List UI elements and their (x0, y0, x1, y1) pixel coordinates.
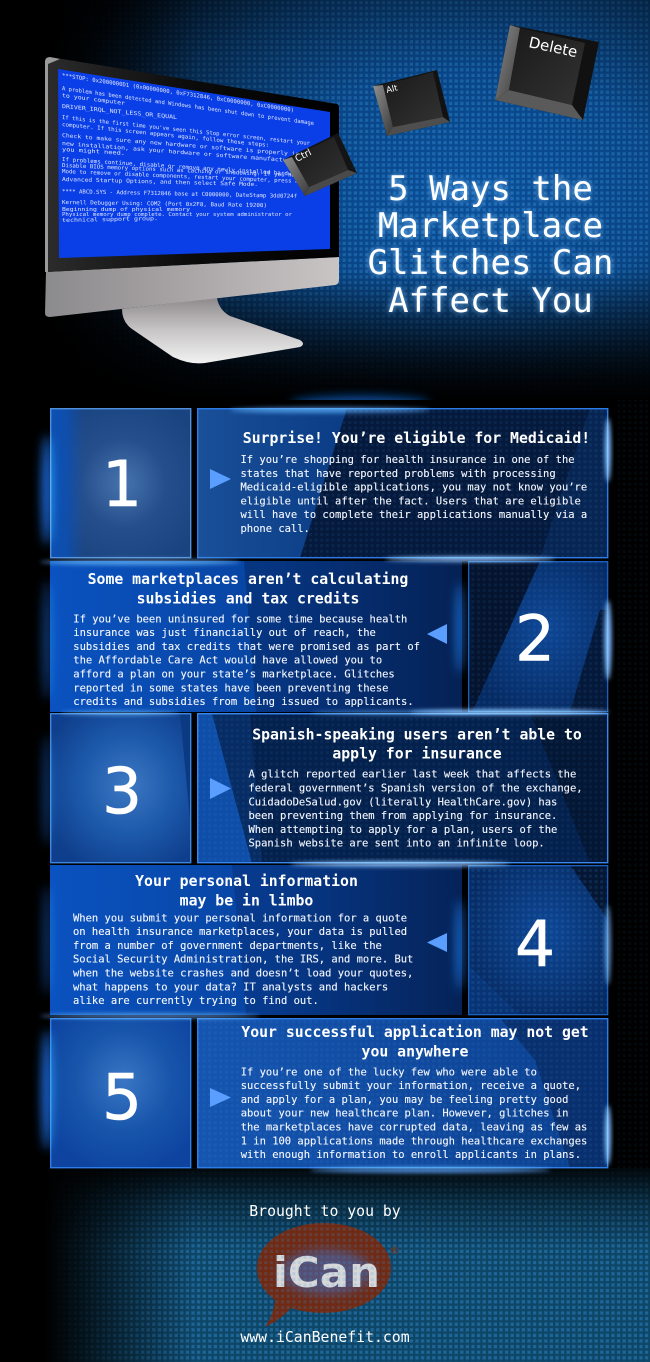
body 5: 1 in 100 applications made through healthcare exchanges (241, 1135, 587, 1147)
body 4 (73, 912, 413, 1007)
error text on screen: If this is the first time you've seen this Stop error screen, restart your (62, 115, 311, 147)
body 2: If you’ve been uninsured for some time because health (73, 613, 407, 625)
logo: iCan speech bubble: ® (389, 1244, 400, 1257)
body 5: successfully submit your information, receive a quote, (241, 1080, 581, 1092)
error text on screen: you might need. (62, 147, 125, 157)
body 3: CuidadoDeSalud.gov (literally HealthCare.gov) has (248, 796, 557, 808)
arrow 2 (427, 624, 447, 644)
title (368, 169, 613, 321)
heading 5 (241, 1024, 589, 1060)
body 1: Medicaid-eligible applications, you may not know you’re (240, 482, 587, 494)
heading 5: you anywhere (362, 1044, 469, 1060)
body 1: will have to complete their applications manually via a (240, 509, 587, 521)
body 4: from a number of government departments, like the (73, 940, 382, 952)
body 1: states that have reported problems with processing (240, 468, 556, 480)
error text on screen: Physical memory dump complete. Contact your system administrator or (62, 212, 293, 218)
panel: step 2 (50, 561, 608, 712)
title: 5 Ways the (388, 169, 593, 209)
number tile 5: 5 (102, 1061, 142, 1134)
monitor bezel (45, 57, 339, 272)
body 5: the marketplaces have corrupted data, leaving as few as (241, 1122, 587, 1134)
logo: iCan speech bubble (257, 1223, 400, 1327)
heading 4: may be in limbo (180, 892, 313, 909)
arrow 3 (210, 778, 231, 799)
body 3: been preventing them from applying for insurance. (248, 810, 557, 822)
error text on screen: DRIVER_IRQL_NOT_LESS_OR_EQUAL (62, 104, 178, 121)
error text on screen: to your computer (62, 93, 126, 107)
error text on screen: Beginning dump of physical memory (62, 207, 191, 213)
number tile 3: 3 (102, 755, 142, 828)
key: Alt: Alt (385, 83, 400, 96)
number tile 4: 4 (515, 908, 555, 981)
monitor stand (122, 298, 303, 363)
error text on screen: If problems continue, disable or remove any newly installed hardware (62, 157, 302, 178)
body 3 (248, 769, 583, 850)
body 2: reported in some states have been preventing these (73, 682, 388, 694)
body 2: credits and subsidies from being issued to applicants. (73, 696, 414, 708)
body 4: on health insurance marketplaces, your data is pulled (73, 926, 407, 938)
error text on screen: computer. If this screen appears again, follow these steps: (62, 122, 269, 149)
arrow 5 (210, 1088, 231, 1107)
body 5 (241, 1066, 587, 1161)
body 4: what happens to your data? IT analysts and hackers (73, 981, 388, 993)
body 3: When attempting to apply for a plan, users of the (248, 824, 557, 836)
body 2: insurance was just financially out of reach, the (73, 627, 376, 639)
error text on screen: Disable BIOS memory options such as caching or shadowing. If you need (62, 163, 302, 179)
heading 4 (135, 873, 358, 909)
monitor chin (45, 257, 339, 317)
error text on screen: Check to make sure any new hardware or software is properly installed. (62, 133, 330, 160)
body 2: the Affordable Care Act would have allowed you to (73, 655, 382, 667)
error text on screen: **** ABCD.SYS - Address F7312846 base at C0000000, DateStamp 3dd0724f (62, 189, 297, 200)
body 5: with enough information to enroll applicants in plans. (241, 1149, 581, 1161)
text card 5 (197, 1018, 608, 1168)
body 2: afford a plan on your state’s marketplace. Glitches (73, 668, 395, 680)
arrow 4 (427, 933, 447, 952)
heading 2: Some marketplaces aren’t calculating (88, 571, 408, 588)
key: Alt (373, 70, 450, 136)
logo: iCan speech bubble: iCan (273, 1248, 380, 1297)
footer credit text: Brought to you by (249, 1203, 401, 1220)
text card 4 (50, 865, 462, 1015)
key: Ctrl (283, 133, 357, 196)
body 4: When you submit your personal information for a quote (73, 912, 407, 924)
panel: step 5 (50, 1018, 608, 1168)
body 3: Spanish website are sent into an infinite loop. (248, 838, 545, 850)
body 4: alike are currently trying to find out. (73, 995, 319, 1007)
error text on screen: Mode to remove or disable components, restart your computer, press F8 (62, 169, 302, 185)
title: Glitches Can (368, 243, 613, 283)
number tile 1: 1 (102, 448, 142, 521)
body 1: eligible until after the fact. Users that are eligible (240, 495, 581, 507)
error text on screen: Advanced Startup Options, and then select Safe Mode. (62, 177, 258, 188)
heading 4: Your personal information (135, 873, 358, 890)
text card 2 (50, 561, 462, 712)
body 1: phone call. (240, 523, 310, 535)
number tile 4 (468, 865, 608, 1015)
heading 1: Surprise! You’re eligible for Medicaid! (243, 430, 590, 447)
body 1 (240, 454, 587, 535)
body 1: If you’re shopping for health insurance in one of the (240, 454, 575, 466)
body 5: and apply for a plan, you may be feeling pretty good (241, 1094, 568, 1106)
number tile 2: 2 (515, 603, 555, 676)
error text on screen: A problem has been detected and Windows has been shut down to prevent damage (62, 86, 314, 127)
error text on screen: ***STOP: 0x2000000D1 (0x00000000, 0xF7312846, 0xC0000000, 0xC0000000) (62, 73, 294, 114)
body 3: federal government’s Spanish version of the exchange, (248, 782, 583, 794)
heading 3 (252, 726, 582, 763)
body 5: about your new healthcare plan. However, glitches in (241, 1108, 568, 1120)
panel: step 1 (50, 408, 608, 558)
body 2 (73, 613, 420, 708)
monitor illustration (45, 57, 339, 363)
key: Delete: Delete (527, 33, 579, 61)
error text on screen: new installation, ask your hardware or software manufacturer for any (62, 141, 331, 167)
footer website address: www.iCanBenefit.com (240, 1329, 410, 1346)
body 4: when the website crashes and doesn’t load your quotes, (73, 968, 413, 980)
number tile 5 (50, 1018, 191, 1168)
heading 2 (88, 571, 408, 607)
body 4: Social Security Administration, the IRS, and more. But (73, 954, 413, 966)
number tile 2 (468, 561, 608, 712)
heading 3: Spanish-speaking users aren’t able to (252, 726, 582, 743)
screen (58, 69, 330, 258)
body 3: A glitch reported earlier last week that affects the (248, 769, 576, 781)
heading 3: apply for insurance (332, 746, 502, 763)
body 2: subsidies and tax credits that were promised as part of (73, 641, 420, 653)
error text on screen: technical support group. (62, 216, 158, 224)
title: Affect You (388, 281, 593, 321)
error text on screen: Kernell Debugger Using: COM2 (Port 0x2F8, Baud Rate 19200) (62, 200, 267, 209)
title: Marketplace (378, 206, 603, 246)
number tile 3 (50, 713, 191, 863)
arrow 1 (210, 469, 231, 489)
heading 5: Your successful application may not get (241, 1024, 589, 1041)
text card 1 (197, 408, 608, 558)
number tile 1 (50, 408, 191, 558)
panel: step 4 (50, 865, 608, 1015)
heading 2: subsidies and tax credits (137, 590, 359, 607)
text card 3 (197, 713, 608, 863)
body 5: If you’re one of the lucky few who were able to (241, 1066, 537, 1078)
key: Ctrl: Ctrl (293, 147, 313, 165)
panel: step 3 (50, 713, 608, 863)
key: Delete (495, 25, 599, 120)
error text on screen (62, 73, 331, 224)
